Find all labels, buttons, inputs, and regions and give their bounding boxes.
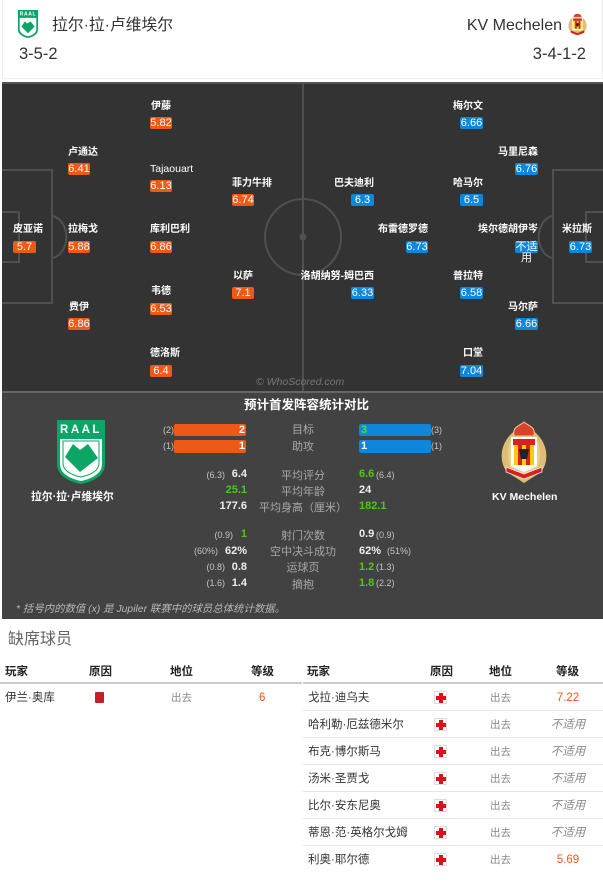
away players: 马尔萨 (508, 302, 538, 313)
column: 原因: 原因 (89, 666, 112, 678)
away row 2: 哈利勒·厄兹德米尔 (308, 719, 404, 731)
stat rows: 平均身高（厘米） (259, 502, 347, 514)
pitch panel (2, 82, 603, 391)
stat rows: 0.8 (232, 561, 247, 573)
away players: 6.66 (461, 117, 482, 129)
stat rows: 62% (359, 545, 381, 557)
home team logo large: RAAL (60, 424, 102, 436)
away players: 7.04 (461, 365, 482, 377)
label: assists: 助攻 (292, 441, 314, 453)
away row 7: 5.69 (557, 854, 579, 866)
away row 2 (303, 711, 603, 738)
away players: 马里尼森 (498, 147, 538, 158)
away players: 梅尔文 (453, 101, 483, 112)
home team logo large (57, 420, 105, 484)
home players: 韦德 (151, 286, 171, 297)
stat rows: 6.6 (359, 468, 374, 480)
away team logo large (502, 421, 546, 483)
home assists bar (174, 440, 246, 453)
home players: 6.41 (68, 163, 90, 175)
away row 1: 出去 (490, 692, 511, 704)
home players: 伊藤 (151, 101, 171, 112)
away row 5 (303, 792, 603, 819)
icon: red card (95, 692, 104, 703)
away row 5: 比尔·安东尼奥 (308, 800, 381, 812)
stat rows: 空中决斗成功 (270, 546, 336, 558)
away row 6 (303, 819, 603, 846)
away formation: 3-4-1-2 (533, 45, 586, 63)
away row 5: 出去 (490, 800, 511, 812)
stat rows: 1.8 (359, 577, 374, 589)
away players (300, 100, 592, 377)
home assists season: (1) (163, 441, 174, 451)
away row 5: 不适用 (551, 800, 585, 812)
stat rows: 0.9 (359, 528, 374, 540)
column: 玩家: 玩家 (307, 666, 330, 678)
player: 洛胡纳努-姆巴西 (300, 270, 374, 299)
home players: 6.4 (153, 365, 169, 377)
player: 菲力牛排 (232, 177, 272, 206)
home goals bar (174, 424, 246, 436)
away row 2: 不适用 (551, 719, 585, 731)
stat rows: 24 (359, 484, 371, 496)
home players: 6.74 (232, 194, 254, 206)
stat rows (194, 468, 411, 591)
away players: 不适 (516, 241, 538, 253)
home players: 库利巴利 (150, 224, 190, 235)
stat rows: (0.9) (214, 530, 233, 540)
away assists season: (1) (431, 441, 442, 451)
stat rows: 1.2 (359, 561, 374, 573)
home team label: 拉尔·拉·卢维埃尔 (31, 491, 114, 503)
home players: Tajaouart (150, 163, 193, 175)
away row 4: 出去 (490, 773, 511, 785)
home players: 费伊 (69, 302, 89, 313)
away row 3 (303, 738, 603, 765)
away players: 6.66 (516, 318, 537, 330)
column: 玩家: 玩家 (5, 666, 28, 678)
stat rows: (2.2) (376, 578, 395, 588)
goals row (174, 424, 431, 436)
player: 埃尔德胡伊岑 (478, 223, 538, 264)
away row 6: 蒂恩·范·英格尔戈姆 (308, 827, 408, 839)
stat rows: (6.4) (376, 470, 395, 480)
stat rows: (60%) (194, 546, 218, 556)
away row 3: 出去 (490, 746, 511, 758)
home players: 卢通达 (68, 147, 98, 158)
stat rows: 1.4 (232, 577, 247, 589)
away team logo small (568, 14, 587, 36)
player: 布雷德罗德 (378, 223, 428, 253)
home players: 拉梅戈 (68, 224, 98, 235)
player: 卢通达 (68, 146, 98, 175)
home assists bar: 1 (239, 440, 245, 452)
player: 普拉特 (453, 270, 483, 299)
home players: 5.88 (68, 241, 90, 253)
home goals bar: 2 (239, 424, 245, 436)
stats title: 预计首发阵容统计对比 (244, 398, 369, 412)
stat rows: (0.9) (376, 530, 395, 540)
home players: 7.1 (235, 287, 251, 299)
away row 1 (303, 684, 603, 711)
stat rows: 摘抱 (292, 579, 314, 591)
stat rows: 射门次数 (281, 530, 325, 542)
player: 伊藤 (150, 100, 172, 129)
away goals bar (359, 424, 431, 436)
home team name: 拉尔·拉·卢维埃尔 (52, 17, 173, 34)
away row 4: 汤米·圣贾戈 (308, 773, 369, 785)
away players: 用 (521, 252, 532, 264)
away players: 6.58 (461, 287, 482, 299)
stat rows: 运球页 (286, 562, 320, 574)
away team label: KV Mechelen (492, 491, 557, 503)
player: 皮亚诺 (13, 223, 43, 253)
stat rows: 62% (225, 545, 247, 557)
home players: 6.13 (150, 180, 172, 192)
stat rows: (51%) (387, 546, 411, 556)
away players: 巴夫迪利 (334, 178, 374, 189)
home formation: 3-5-2 (19, 45, 58, 63)
away goals season: (3) (431, 425, 442, 435)
away players: 普拉特 (453, 271, 483, 282)
away row 3: 布克·博尔斯马 (308, 746, 381, 758)
away assists bar (359, 440, 431, 453)
away row 3: 不适用 (551, 746, 585, 758)
pitch markings (2, 84, 603, 391)
stat rows: 平均评分 (281, 470, 325, 482)
watermark: © WhoScored.com (256, 376, 344, 388)
header panel (2, 0, 603, 79)
home goals season: (2) (163, 425, 174, 435)
away row 6: 不适用 (551, 827, 585, 839)
column: 等级: 等级 (556, 666, 579, 678)
stat rows: 1 (241, 528, 247, 540)
assists row (174, 440, 431, 453)
home row: 伊兰·奥库: 出去 (171, 692, 192, 704)
home players: 6.53 (150, 303, 172, 315)
away row 7: 出去 (490, 854, 511, 866)
away assists bar: 1 (361, 440, 367, 452)
home players: 6.86 (150, 241, 172, 253)
column: 地位: 地位 (489, 666, 512, 678)
player: 马尔萨 (508, 301, 538, 330)
column: 原因: 原因 (430, 666, 453, 678)
player: 口堂 (460, 347, 483, 377)
player: 哈马尔 (453, 177, 483, 206)
home players: 德洛斯 (150, 348, 180, 359)
stat rows: (0.8) (206, 562, 225, 572)
stats panel (2, 391, 603, 619)
player: 韦德 (150, 285, 172, 315)
player: 米拉斯 (562, 222, 592, 253)
away players: 洛胡纳努-姆巴西 (301, 271, 374, 282)
stat rows: 182.1 (359, 500, 387, 512)
player: 以萨 (232, 270, 254, 299)
home players: 菲力牛排 (232, 178, 272, 189)
away players: 米拉斯 (562, 224, 592, 235)
column: 地位: 地位 (170, 666, 193, 678)
player: 巴夫迪利 (334, 177, 374, 206)
stat rows: 177.6 (219, 500, 247, 512)
player: 费伊 (68, 301, 90, 330)
stat rows: 6.4 (232, 468, 247, 480)
player: 拉梅戈 (68, 222, 98, 253)
column: 等级: 等级 (251, 666, 274, 678)
home players (13, 100, 272, 377)
home players: 以萨 (233, 271, 253, 282)
home row: 伊兰·奥库: 伊兰·奥库 (5, 692, 55, 704)
stat rows: 25.1 (226, 484, 247, 496)
player: 德洛斯 (150, 347, 180, 377)
home team logo small (18, 10, 38, 38)
player: 库利巴利 (150, 223, 190, 253)
footnote: * 括号内的数值 (x) 是 Jupiler 联赛中的球员总体统计数据。 (16, 604, 285, 615)
home players: 5.82 (150, 117, 172, 129)
home row: 伊兰·奥库 (5, 691, 265, 704)
away players: 6.3 (355, 194, 370, 206)
away players: 哈马尔 (453, 178, 483, 189)
away goals bar: 3 (361, 424, 367, 436)
home row: 伊兰·奥库: 6 (259, 692, 265, 704)
away players: 埃尔德胡伊岑 (478, 224, 538, 235)
away players: 口堂 (463, 348, 483, 359)
home team logo small: RAAL (20, 12, 36, 18)
home players: 皮亚诺 (13, 224, 43, 235)
away players: 6.33 (352, 287, 373, 299)
away row 1: 7.22 (557, 692, 579, 704)
away row 6: 出去 (490, 827, 511, 839)
home players: 5.7 (17, 241, 32, 253)
away players: 6.76 (516, 163, 537, 175)
away team name: KV Mechelen (467, 17, 562, 34)
home players: 6.86 (68, 318, 90, 330)
player: 马里尼森 (498, 146, 538, 175)
away row 1: 戈拉·迪乌夫 (308, 692, 369, 704)
away row 4 (303, 765, 603, 792)
away players: 6.73 (406, 241, 428, 253)
section heading: missing players: 缺席球员 (8, 631, 72, 648)
stat rows: (1.3) (376, 562, 395, 572)
stat rows: (1.6) (206, 578, 225, 588)
away row 7: 利奥·耶尔德 (308, 854, 369, 866)
stat rows: 平均年龄 (281, 486, 325, 498)
label: goals: 目标 (292, 424, 314, 436)
away row 4: 不适用 (551, 773, 585, 785)
home table header (0, 660, 302, 684)
player: 梅尔文 (453, 100, 483, 129)
away players: 布雷德罗德 (378, 224, 428, 235)
away table header (303, 660, 603, 684)
away row 2: 出去 (490, 719, 511, 731)
away row 7 (308, 853, 579, 866)
player: Tajaouart (150, 163, 194, 192)
away players: 6.73 (570, 241, 591, 253)
stat rows: (6.3) (206, 470, 225, 480)
away players: 6.5 (464, 194, 479, 206)
